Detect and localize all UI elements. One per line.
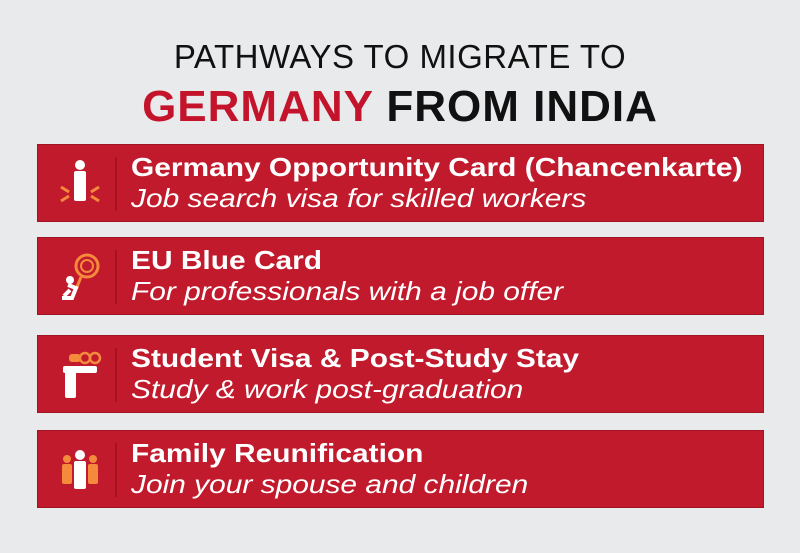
title line 1: PATHWAYS TO MIGRATE TO — [174, 38, 626, 75]
subtitle: Job search visa for skilled workers — [131, 183, 586, 213]
heading: Germany Opportunity Card (Chancenkarte) — [131, 152, 742, 182]
icon: family group — [62, 450, 98, 489]
icon: magnifier runner — [62, 254, 100, 300]
panel: family reunification — [37, 430, 764, 508]
heading: EU Blue Card — [131, 245, 322, 275]
panel: opportunity card — [37, 144, 764, 222]
subtitle: Study & work post-graduation — [131, 374, 523, 404]
title line 2: GERMANY FROM INDIA — [142, 82, 658, 131]
subtitle: Join your spouse and children — [131, 469, 528, 499]
subtitle: For professionals with a job offer — [131, 276, 563, 306]
heading: Family Reunification — [131, 438, 423, 468]
icon: binoculars person — [63, 352, 102, 398]
panel: student visa — [37, 335, 764, 413]
panel: EU blue card — [37, 237, 764, 315]
icon: person with arrows — [60, 160, 100, 202]
heading: Student Visa & Post-Study Stay — [131, 343, 579, 373]
